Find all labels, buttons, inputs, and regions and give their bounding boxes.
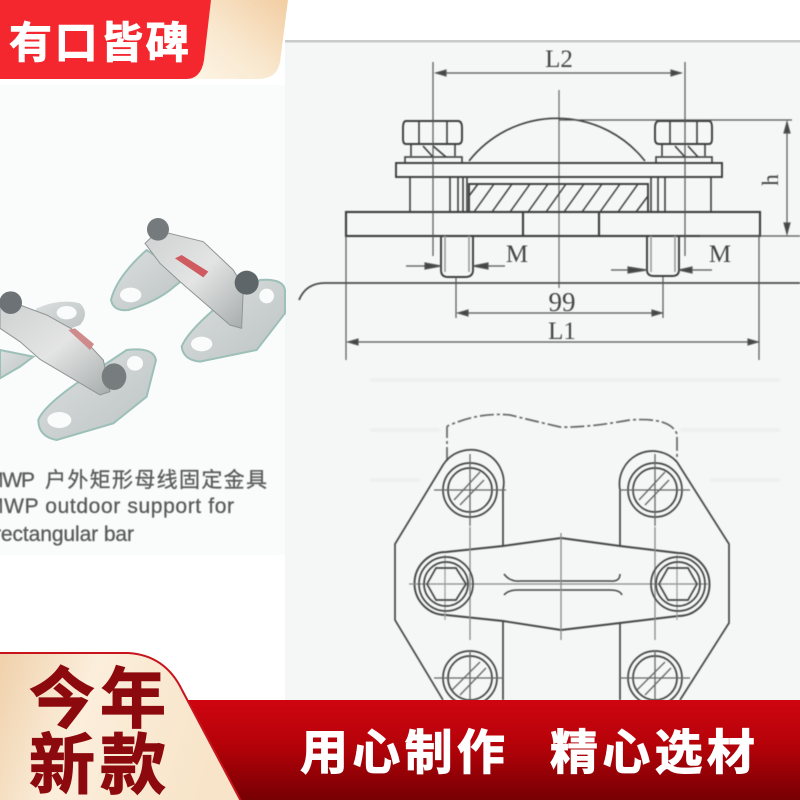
panel: faint table rows behind the drawing [370,380,780,480]
label: L2: L2 [545,46,573,73]
center slot [504,574,622,595]
panel: left product background [0,85,285,555]
dashed outline [447,414,677,461]
product photo: metal brackets [0,218,285,440]
right bolt and nut [647,121,712,276]
label: M left: M [506,241,528,268]
bottom cream tab [0,653,243,800]
product caption [0,469,267,546]
bottom red banner [180,700,800,800]
right plate outline [619,451,729,700]
top badge cream background [190,0,288,79]
bolt top right [620,454,690,526]
dimension h [559,120,800,236]
center line [558,90,560,288]
dome [469,118,645,161]
hatched bar [469,184,648,212]
right bracket [111,218,285,362]
top badge red [0,0,211,79]
bolt bottom left [434,650,503,705]
left plate outline [395,450,504,700]
side view technical drawing [299,62,800,360]
dimension M markers [406,263,712,273]
long horizontal line [299,283,800,300]
center link [414,538,710,630]
centre lines [409,527,708,640]
caption line: Chinese: 户外矩形母线固定金具 [45,469,267,492]
tab heading: new model: 新款 [29,728,171,800]
bolt bottom right [620,650,690,705]
tab heading: this year: 今年 [29,662,171,736]
panel: technical drawing background [285,40,800,701]
banner slogan: 用心制作 [300,727,509,780]
dimension L1 [346,236,759,360]
banner slogan: 精心选材 [550,727,759,780]
label: M right: M [709,241,731,268]
hex bolt right [651,557,705,611]
left bracket [0,291,156,440]
label: L1: L1 [548,318,576,345]
hex bolt left [419,557,473,611]
dimension L2 [433,62,685,256]
upper plate [396,163,722,177]
left bolt and nut [403,121,473,277]
label: 99: 99 [548,287,576,317]
bolt top left [434,454,506,526]
top badge title: 有口皆碑 [9,20,191,68]
top view technical drawing [395,414,729,705]
label: h: h [758,174,783,186]
base plate [346,212,760,236]
dimension 99 [456,277,663,318]
